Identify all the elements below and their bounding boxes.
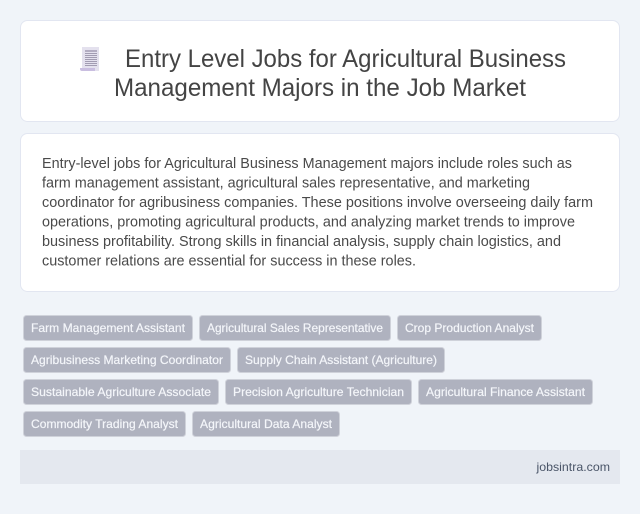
tag: Agricultural Finance Assistant: Agricultural Finance Assistant	[426, 385, 586, 399]
tag: Agricultural Data Analyst	[192, 412, 340, 436]
footer source text: jobsintra.com	[535, 460, 610, 474]
tag: Agricultural Sales Representative	[200, 316, 390, 340]
tag: Farm Management Assistant: Farm Management Assistant	[31, 321, 186, 335]
tag: Supply Chain Assistant (Agriculture)	[238, 348, 444, 372]
panel: title card	[20, 20, 620, 122]
heading: Entry Level Jobs for Agricultural Business	[125, 45, 566, 73]
tag: Crop Production Analyst	[398, 316, 542, 340]
tag: Agricultural Sales Representative: Agricultural Sales Representative	[207, 321, 383, 335]
heading: Management Majors in the Job Market	[114, 74, 526, 102]
tag: Commodity Trading Analyst	[24, 412, 186, 436]
text block: description: coordinator for agribusiness companies. These positions involve overseeing daily farm	[42, 195, 593, 211]
heading	[114, 45, 566, 102]
icon: document scroll	[80, 47, 99, 71]
tag: Sustainable Agriculture Associate: Sustainable Agriculture Associate	[31, 385, 211, 399]
footer bar	[20, 450, 620, 484]
tag: Precision Agriculture Technician	[226, 380, 412, 404]
text block: description: farm management assistant, agricultural sales representative, and marketing	[42, 176, 530, 192]
tag: Precision Agriculture Technician: Precision Agriculture Technician	[233, 385, 404, 399]
tag list	[24, 316, 592, 436]
tag: Agribusiness Marketing Coordinator: Agribusiness Marketing Coordinator	[31, 353, 223, 367]
tag: Farm Management Assistant	[24, 316, 192, 340]
text block: description: operations, promoting agricultural products, and analyzing market trends to improve	[42, 214, 575, 230]
panel: description card	[20, 134, 620, 292]
tag: Crop Production Analyst: Crop Production Analyst	[405, 321, 535, 335]
tag: Agricultural Finance Assistant	[418, 380, 592, 404]
tag: Supply Chain Assistant (Agriculture): Supply Chain Assistant (Agriculture)	[245, 353, 437, 367]
tag: Sustainable Agriculture Associate	[24, 380, 218, 404]
text block: description	[42, 156, 593, 270]
text block: description: customer relations are essential for success in these roles.	[42, 254, 416, 270]
text block: description: business profitability. Strong skills in financial analysis, supply chain logistics, and	[42, 234, 561, 250]
tag: Agricultural Data Analyst: Agricultural Data Analyst	[200, 417, 333, 431]
tag: Agribusiness Marketing Coordinator	[24, 348, 230, 372]
text block: description: Entry-level jobs for Agricultural Business Management majors include roles such as	[42, 156, 572, 172]
tag: Commodity Trading Analyst: Commodity Trading Analyst	[31, 417, 179, 431]
